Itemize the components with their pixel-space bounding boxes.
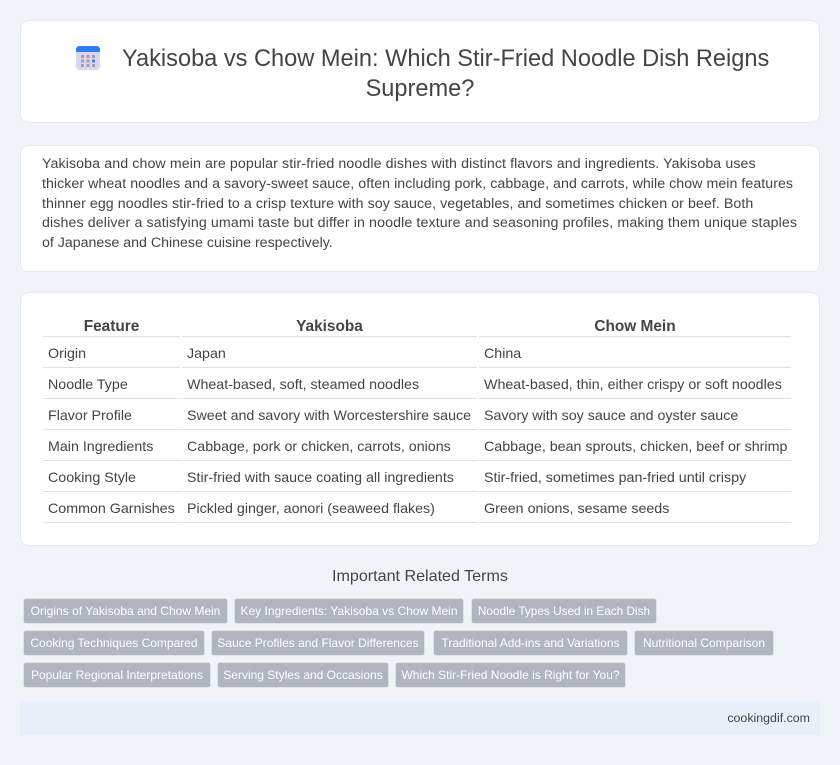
row: main ingredients: Cabbage, bean sprouts, chicken, beef or shrimp <box>484 439 787 455</box>
row: noodle type: Wheat-based, soft, steamed noodles <box>187 377 419 393</box>
row: common garnishes <box>43 501 791 523</box>
tag <box>217 662 389 688</box>
intro paragraph: of Japanese and Chinese cuisine respectively. <box>42 235 333 251</box>
row: cooking style: Stir-fried with sauce coating all ingredients <box>187 470 454 486</box>
tag <box>395 662 626 688</box>
row: flavor profile: Savory with soy sauce and oyster sauce <box>484 408 738 424</box>
row: flavor profile <box>43 408 791 430</box>
tag: Serving Styles and Occasions <box>223 668 383 682</box>
tag: Sauce Profiles and Flavor Differences <box>217 636 419 650</box>
tag: Popular Regional Interpretations <box>31 668 203 682</box>
tag <box>471 598 657 624</box>
header panel <box>20 20 820 123</box>
table headers: Feature <box>84 318 139 335</box>
footer bar <box>20 701 820 735</box>
intro paragraph: thinner egg noodles stir-fried to a crisp texture with soy sauce, vegetables, and sometimes chicken or beef. Both <box>42 196 753 212</box>
related terms tags <box>23 598 774 688</box>
tag <box>433 630 628 656</box>
intro text panel <box>20 145 820 272</box>
tag <box>634 630 774 656</box>
row: cooking style: Cooking Style <box>48 470 136 486</box>
tag: Origins of Yakisoba and Chow Mein <box>31 604 220 618</box>
tag: Noodle Types Used in Each Dish <box>478 604 650 618</box>
footer source: cookingdif.com <box>727 711 810 725</box>
row: origin: Origin <box>48 346 86 362</box>
intro paragraph: Yakisoba and chow mein are popular stir-fried noodle dishes with distinct flavors and ingredients. Yakisoba uses <box>42 156 756 172</box>
row: main ingredients <box>43 439 791 461</box>
tag <box>23 598 228 624</box>
row: origin: Japan <box>187 346 226 362</box>
row: origin <box>43 346 791 368</box>
tag <box>211 630 425 656</box>
row: origin: China <box>484 346 521 362</box>
tag: Nutritional Comparison <box>643 636 765 650</box>
title <box>122 46 769 102</box>
table headers: Yakisoba <box>296 318 363 335</box>
table headers <box>43 318 791 337</box>
icon: calendar <box>76 46 100 70</box>
row: common garnishes: Green onions, sesame seeds <box>484 501 669 517</box>
intro paragraph: thicker wheat noodles and a savory-sweet sauce, often including pork, cabbage, and carrots, while chow mein features <box>42 176 793 192</box>
title: Yakisoba vs Chow Mein: Which Stir-Fried Noodle Dish Reigns <box>122 46 769 72</box>
row: flavor profile: Sweet and savory with Worcestershire sauce <box>187 408 471 424</box>
row: noodle type: Wheat-based, thin, either crispy or soft noodles <box>484 377 782 393</box>
tag <box>23 630 205 656</box>
table headers: Chow Mein <box>594 318 676 335</box>
row: flavor profile: Flavor Profile <box>48 408 132 424</box>
tag: Traditional Add-ins and Variations <box>441 636 620 650</box>
row: cooking style <box>43 470 791 492</box>
intro paragraph: dishes deliver a satisfying umami taste but differ in noodle texture and seasoning profiles, making them unique staples <box>42 215 797 231</box>
tag: Cooking Techniques Compared <box>30 636 198 650</box>
title: Supreme? <box>366 76 474 102</box>
row: common garnishes: Pickled ginger, aonori (seaweed flakes) <box>187 501 435 517</box>
comparison table panel <box>20 292 820 546</box>
related terms heading: Important Related Terms <box>332 567 508 585</box>
tag: Which Stir-Fried Noodle is Right for You? <box>401 668 620 682</box>
tag <box>23 662 211 688</box>
tag: Key Ingredients: Yakisoba vs Chow Mein <box>240 604 458 618</box>
row: noodle type: Noodle Type <box>48 377 128 393</box>
tag <box>234 598 464 624</box>
row: common garnishes: Common Garnishes <box>48 501 175 517</box>
row: cooking style: Stir-fried, sometimes pan-fried until crispy <box>484 470 746 486</box>
row: main ingredients: Main Ingredients <box>48 439 153 455</box>
row: noodle type <box>43 377 791 399</box>
row: main ingredients: Cabbage, pork or chicken, carrots, onions <box>187 439 451 455</box>
intro paragraph <box>42 156 797 251</box>
